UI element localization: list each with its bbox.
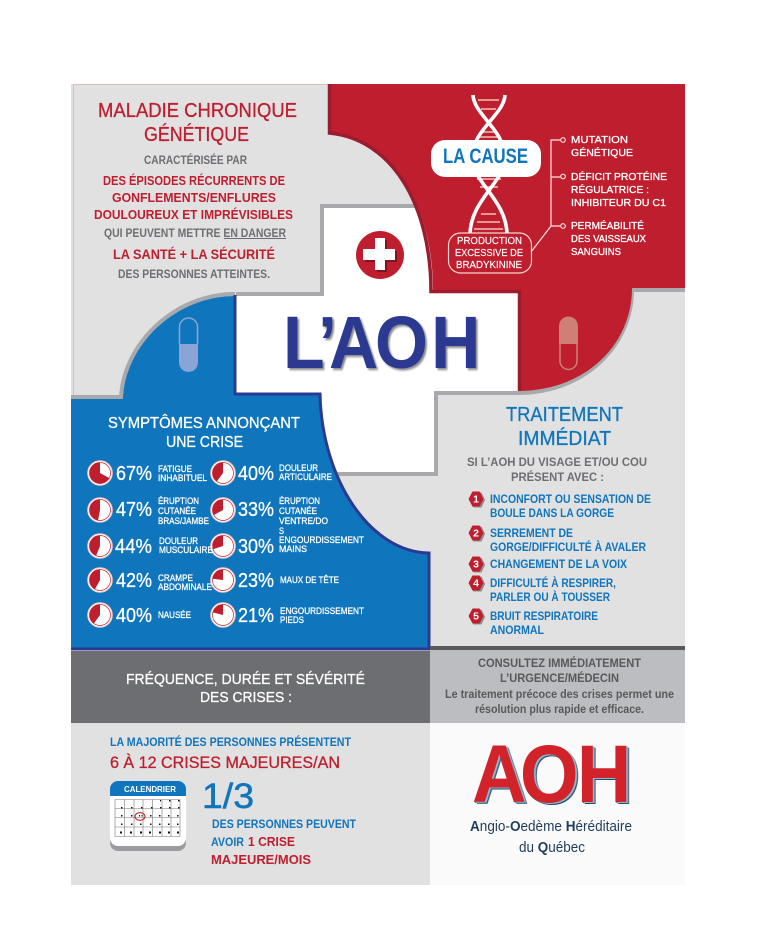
panel: frequency statistics	[71, 723, 430, 885]
percentages: 44%	[115, 535, 152, 558]
text block: warning signs list: SERREMENT DE	[490, 526, 573, 540]
text block: warning signs list: BRUIT RESPIRATOIRE	[490, 609, 598, 623]
symptom labels: ÉRUPTION	[158, 496, 199, 507]
text block: causes list: SANGUINS	[571, 246, 621, 258]
callout: bradykinin production: EXCESSIVE DE	[455, 247, 523, 259]
symptom labels: VENTRE/DO	[279, 516, 328, 527]
white cross	[236, 204, 520, 474]
text block: warning signs list: GORGE/DIFFICULTÉ À AVALER	[490, 539, 646, 554]
numbered badges: 3	[473, 559, 479, 571]
text block: majority: 6 À 12 CRISES MAJEURES/AN	[110, 753, 340, 772]
symptom labels: CRAMPE	[158, 573, 193, 584]
text block: description: DES ÉPISODES RÉCURRENTS DE	[103, 173, 285, 188]
panel: the cause	[328, 84, 685, 391]
heading: traitement immediat: IMMÉDIAT	[518, 427, 611, 450]
text block: warning signs list: ANORMAL	[490, 623, 544, 637]
logo caption	[470, 819, 632, 856]
symptom labels: MAUX DE TÊTE	[280, 575, 339, 586]
panel: consult banner: CONSULTEZ IMMÉDIATEMENT	[478, 657, 641, 670]
panel: logo	[430, 723, 685, 885]
text block: warning signs list: CHANGEMENT DE LA VOIX	[490, 557, 627, 571]
panel: frequency banner: FRÉQUENCE, DURÉE ET SÉVÉRITÉ	[126, 671, 365, 688]
panel: immediate treatment content	[467, 404, 651, 637]
percentages: 67%	[116, 462, 152, 485]
symptom labels: ENGOURDISSEMENT	[279, 535, 364, 546]
symptom labels: DOULEUR	[279, 463, 318, 474]
text block: causes list: GÉNÉTIQUE	[571, 146, 633, 159]
percentages	[115, 462, 274, 627]
text block: causes list: DES VAISSEAUX	[571, 233, 646, 245]
callout: bradykinin production	[448, 233, 532, 273]
panel: consult banner: résolution plus rapide et efficace.	[475, 704, 644, 716]
heading: traitement immediat: TRAITEMENT	[506, 404, 623, 426]
text block: description: LA SANTÉ + LA SÉCURITÉ	[113, 246, 275, 262]
callout: bradykinin production: BRADYKININE	[456, 259, 522, 271]
text block: causes list: RÉGULATRICE :	[571, 183, 649, 196]
heading: symptoms: SYMPTÔMES ANNONÇANT	[108, 415, 300, 432]
icon: red pill	[559, 316, 578, 370]
percentages: 23%	[238, 569, 274, 592]
text block: warning signs list: DIFFICULTÉ À RESPIRER,	[490, 575, 616, 590]
pie charts	[88, 461, 235, 627]
text block: description: QUI PEUVENT METTRE EN DANGER	[104, 226, 286, 240]
callout: la cause: LA CAUSE	[443, 145, 528, 168]
heading: maladie chronique: MALADIE CHRONIQUE	[98, 100, 297, 122]
percentages: 40%	[238, 462, 274, 485]
connector lines	[531, 138, 565, 252]
text block: causes list: MUTATION	[571, 134, 628, 146]
heading: symptoms: UNE CRISE	[166, 434, 243, 451]
icon: medical cross badge	[356, 231, 404, 279]
heading: traitement immediat	[506, 404, 623, 450]
text block: description	[94, 152, 293, 281]
text block: description: DOULOUREUX ET IMPRÉVISIBLES	[94, 207, 293, 222]
text block: description: GONFLEMENTS/ENFLURES	[112, 190, 276, 205]
panel: symptoms	[71, 294, 430, 650]
text block: warning signs list: BOULE DANS LA GORGE	[490, 506, 614, 520]
percentages: 30%	[238, 535, 274, 558]
text block: majority	[110, 734, 352, 772]
symptom labels: ENGOURDISSEMENT	[280, 606, 364, 617]
pie outlines	[90, 462, 234, 626]
numbered badges: 1	[473, 494, 479, 506]
logo caption: Angio-Oedème Héréditaire	[470, 819, 632, 835]
symptom labels	[158, 463, 364, 626]
text block: warning signs list: PARLER OU À TOUSSER	[490, 589, 610, 604]
text block: warning signs list	[490, 492, 651, 637]
text block: condition: SI L’AOH DU VISAGE ET/OU COU	[467, 455, 647, 469]
heading: maladie chronique	[98, 100, 297, 146]
symptom labels: MAINS	[279, 544, 307, 555]
text block: causes list: DÉFICIT PROTÉINE	[571, 170, 667, 183]
symptom labels: FATIGUE	[158, 464, 192, 475]
panel: consult banner: Le traitement précoce des crises permet une	[445, 689, 674, 701]
icon: calendar: CALENDRIER	[124, 784, 176, 794]
text block: one major crisis per month: DES PERSONNES PEUVENT	[212, 817, 357, 831]
percentages: 47%	[116, 498, 152, 521]
stat: one third: 1/3	[202, 777, 254, 816]
text block: one major crisis per month: AVOIR	[211, 835, 244, 849]
symptom labels: PIEDS	[280, 615, 304, 626]
panel: consult banner	[430, 646, 685, 723]
text block: causes list: PERMÉABILITÉ	[571, 219, 644, 232]
panel: frequency banner: DES CRISES :	[200, 689, 292, 706]
numbered badges: 5	[473, 611, 479, 623]
percentages: 40%	[116, 604, 152, 627]
symptom labels: BRAS/JAMBE	[158, 516, 209, 527]
numbered badges: 2	[473, 528, 479, 540]
pie wedges	[89, 462, 223, 623]
text block: majority: LA MAJORITÉ DES PERSONNES PRÉSENTENT	[110, 734, 352, 749]
percentages: 42%	[116, 569, 152, 592]
numbered badges: 4	[473, 578, 479, 590]
callout: bradykinin production: PRODUCTION	[457, 235, 522, 247]
symptom labels: MUSCULAIRE	[159, 545, 213, 556]
text block: warning signs list: INCONFORT OU SENSATION DE	[490, 492, 651, 506]
panel: consult banner: L’URGENCE/MÉDECIN	[500, 672, 619, 685]
numbered badges	[468, 492, 485, 624]
symptom labels: CUTANÉE	[158, 506, 196, 517]
text block: description: DES PERSONNES ATTEINTES.	[118, 267, 270, 281]
text block: condition	[467, 455, 647, 484]
text block: causes list: INHIBITEUR DU C1	[571, 197, 666, 209]
symptom labels: NAUSÉE	[158, 610, 191, 621]
callout: la cause	[431, 140, 541, 177]
heading: maladie chronique: GÉNÉTIQUE	[144, 123, 249, 146]
text block: causes list	[571, 134, 667, 258]
symptom labels: INHABITUEL	[158, 473, 207, 484]
text block: one major crisis per month	[211, 817, 357, 867]
icon: blue pill	[179, 318, 198, 372]
symptom labels: ÉRUPTION	[279, 496, 320, 507]
heading: symptoms	[108, 415, 300, 451]
logo: AOH: AOH	[472, 728, 631, 820]
symptom labels: ARTICULAIRE	[279, 472, 332, 483]
text block: one major crisis per month: MAJEURE/MOIS	[211, 852, 311, 867]
text block: condition: PRÉSENT AVEC :	[511, 469, 604, 484]
percentages: 21%	[238, 604, 274, 627]
panel: frequency banner	[71, 651, 430, 723]
text block: description: CARACTÉRISÉE PAR	[144, 152, 247, 167]
percentages: 33%	[238, 498, 274, 521]
title: L'AOH: L’AOH	[283, 302, 480, 385]
icon: dna helix	[470, 95, 507, 235]
symptom labels: ABDOMINALE	[158, 582, 212, 593]
symptom labels: CUTANÉE	[279, 506, 317, 517]
icon: calendar	[110, 781, 186, 851]
symptom labels: DOULEUR	[159, 536, 198, 547]
symptom labels: S	[279, 526, 284, 537]
logo caption: du Québec	[519, 840, 585, 856]
panel: immediate treatment background	[333, 288, 685, 647]
text block: one major crisis per month: 1 CRISE	[248, 834, 295, 849]
panel: chronic genetic disease	[71, 84, 436, 400]
